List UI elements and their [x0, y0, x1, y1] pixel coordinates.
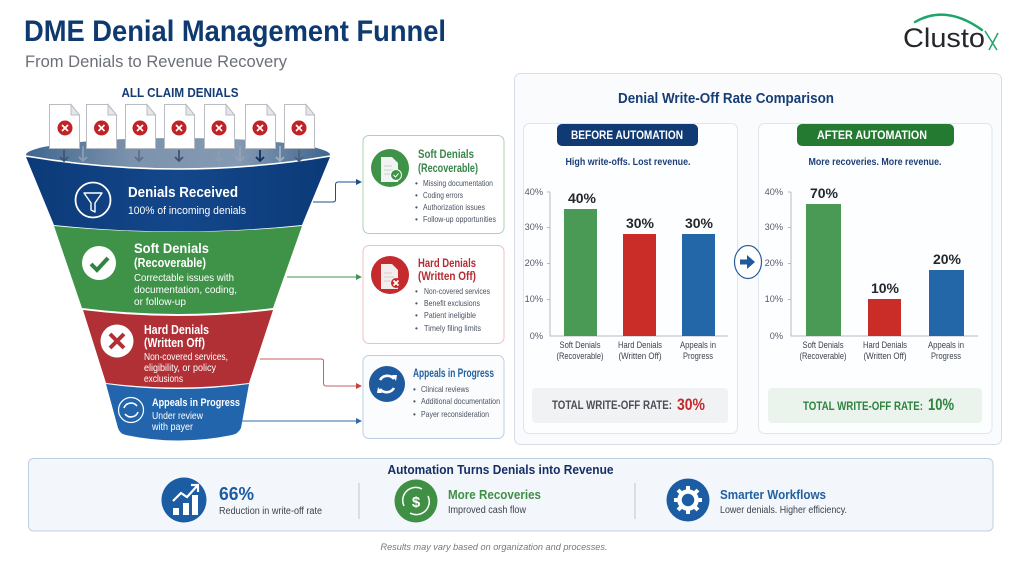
card: soft denials: Authorization issues — [423, 203, 485, 212]
bar chart: before — [525, 187, 728, 361]
funnel tier: hard denials — [83, 310, 273, 388]
card: hard denials: (Written Off) — [418, 271, 476, 283]
bar chart: after: (Recoverable) — [800, 351, 846, 361]
card: hard denials: • — [415, 287, 418, 296]
funnel tier: appeals: Appeals in Progress — [152, 397, 240, 409]
funnel tier: soft denials: Soft Denials — [134, 240, 209, 256]
connector arrow: soft to hard card — [287, 276, 361, 278]
before badge: BEFORE AUTOMATION — [571, 128, 683, 142]
card: soft denials: • — [415, 215, 418, 224]
summary heading: Automation Turns Denials into Revenue — [388, 462, 614, 477]
funnel tier: denials received: 100% of incoming denials — [128, 205, 246, 217]
bar chart: after — [765, 185, 978, 361]
card: appeals in progress: Additional documentation — [421, 397, 500, 406]
stat: 66% — [162, 478, 322, 522]
funnel tier: hard denials: exclusions — [144, 374, 183, 385]
card: appeals in progress: Payer reconsideration — [421, 410, 489, 419]
bar chart: before: 40% — [568, 190, 597, 206]
bar chart: after: (Written Off) — [864, 351, 906, 361]
bar chart: before: 0% — [530, 331, 543, 341]
divider — [358, 483, 360, 519]
connector arrow: appeals to card — [241, 420, 361, 422]
bar chart: before: 30% — [685, 215, 714, 231]
bar chart: after: 70% — [810, 185, 839, 201]
connector arrow: hard to appeals card — [260, 359, 361, 386]
funnel tier: soft denials: or follow-up — [134, 296, 186, 308]
bar chart: before: (Recoverable) — [556, 351, 604, 361]
icon: funnel — [76, 182, 110, 218]
bar chart: before: Progress — [683, 351, 713, 361]
card: soft denials: Soft Denials — [418, 149, 474, 161]
before total: 30% — [677, 395, 705, 414]
stat: 66%: Reduction in write-off rate — [219, 506, 322, 517]
card: hard denials: Timely filing limits — [424, 324, 481, 333]
document 4 — [164, 104, 194, 148]
comparison heading: Denial Write-Off Rate Comparison — [618, 91, 834, 107]
funnel tier: soft denials — [54, 226, 302, 314]
card: soft denials: Coding errors — [423, 191, 463, 200]
after tagline: More recoveries. More revenue. — [808, 157, 942, 168]
panel: write-off rate comparison — [514, 74, 1002, 444]
divider — [634, 483, 636, 519]
before total — [532, 388, 728, 423]
bar chart: before: 10% — [525, 294, 543, 304]
panel: automation summary — [28, 458, 993, 531]
bar chart: after: 20% — [765, 258, 783, 268]
funnel — [26, 138, 330, 440]
card: appeals in progress — [363, 356, 504, 438]
card: appeals in progress: Appeals in Progress — [413, 368, 494, 380]
card: soft denials: • — [415, 203, 418, 212]
card: soft denials: • — [415, 191, 418, 200]
panel: before automation — [524, 124, 738, 434]
footnote: Results may vary based on organization and processes. — [380, 542, 608, 553]
funnel tier: appeals — [106, 384, 249, 440]
card: hard denials: Hard Denials — [418, 258, 476, 270]
icon: dollar cycle — [394, 480, 438, 522]
card: hard denials — [363, 246, 504, 344]
panel: after automation — [758, 124, 992, 434]
before badge — [557, 124, 698, 146]
bar chart: after: Appeals in — [928, 340, 964, 350]
after badge: AFTER AUTOMATION — [817, 128, 927, 142]
logo: Clustox — [903, 15, 998, 53]
bar chart: before: Soft Denials — [560, 340, 601, 350]
card: appeals in progress: • — [413, 397, 416, 406]
card: hard denials: • — [415, 311, 418, 320]
card: hard denials: Non-covered services — [424, 287, 490, 296]
arrow: before to after — [734, 246, 762, 278]
icon: document check — [371, 149, 409, 187]
funnel tier: appeals: Under review — [152, 411, 204, 422]
card: hard denials: Patient ineligible — [424, 311, 476, 320]
after total — [768, 388, 982, 423]
stat: more recoveries: Improved cash flow — [448, 505, 527, 516]
drop arrows — [60, 146, 303, 161]
card: soft denials: Follow-up opportunities — [423, 215, 496, 224]
document 1 — [50, 104, 80, 148]
bar chart: after: 10% — [871, 280, 900, 296]
bar chart: after: 0% — [770, 331, 783, 341]
icon: document x — [371, 256, 409, 294]
funnel tier: hard denials: (Written Off) — [144, 336, 205, 350]
bar chart: after: 20% — [933, 251, 962, 267]
card: soft denials: • — [415, 179, 418, 188]
funnel tier: soft denials: Correctable issues with — [134, 272, 234, 284]
card: hard denials: • — [415, 324, 418, 333]
funnel tier: hard denials: Hard Denials — [144, 323, 209, 337]
funnel tier: soft denials: (Recoverable) — [134, 256, 206, 270]
bar chart: after: 10% — [765, 294, 783, 304]
bar chart: after: 30% — [765, 222, 783, 232]
logo: Clustox: Clusto — [903, 23, 985, 53]
card: appeals in progress: Clinical reviews — [421, 385, 469, 394]
card: soft denials — [363, 136, 504, 234]
icon: gear — [666, 478, 710, 522]
bar chart: after: Hard Denials — [863, 340, 907, 350]
bar chart: after: 40% — [765, 187, 783, 197]
funnel tier: denials received: Denials Received — [128, 185, 238, 201]
card: appeals in progress: • — [413, 410, 416, 419]
document 5 — [204, 104, 234, 148]
title: DME Denial Management Funnel — [24, 15, 446, 48]
icon: dollar cycle: $ — [412, 494, 421, 511]
bar chart: after: Soft Denials — [802, 340, 844, 350]
document 3 — [126, 104, 156, 148]
icon: growth chart — [162, 478, 206, 522]
bar chart: before: 40% — [525, 187, 543, 197]
funnel tier: soft denials: documentation, coding, — [134, 284, 237, 296]
document 7 — [284, 104, 314, 148]
funnel rim — [26, 138, 330, 172]
stat: 66%: 66% — [219, 484, 254, 504]
document 2 — [86, 104, 116, 148]
stat: smarter workflows — [666, 478, 847, 522]
funnel tier: hard denials: Non-covered services, — [144, 352, 228, 363]
funnel tier: appeals: with payer — [151, 422, 194, 433]
icon: check — [82, 246, 116, 280]
before total: TOTAL WRITE-OFF RATE: — [552, 400, 672, 412]
funnel label: ALL CLAIM DENIALS — [122, 86, 238, 100]
card: hard denials: Benefit exclusions — [424, 299, 480, 308]
icon: x — [100, 324, 134, 358]
before tagline: High write-offs. Lost revenue. — [566, 157, 691, 168]
card: soft denials: (Recoverable) — [418, 163, 478, 175]
card: hard denials: • — [415, 299, 418, 308]
icon: refresh — [369, 366, 405, 402]
after total: TOTAL WRITE-OFF RATE: — [803, 401, 923, 413]
bar chart: before: 30% — [525, 222, 543, 232]
card: appeals in progress: • — [413, 385, 416, 394]
funnel tier: hard denials: eligibility, or policy — [144, 363, 216, 374]
bar chart: before: Hard Denials — [618, 340, 662, 350]
stat: more recoveries: More Recoveries — [448, 487, 541, 502]
card: soft denials: Missing documentation — [423, 179, 493, 188]
bar chart: before: 30% — [626, 215, 655, 231]
after badge — [797, 124, 954, 146]
bar chart: before: 20% — [525, 258, 543, 268]
funnel tier: denials received — [26, 156, 330, 232]
bar chart: before: (Written Off) — [618, 351, 662, 361]
stat: smarter workflows: Lower denials. Higher efficiency. — [720, 505, 847, 516]
bar chart: after: Progress — [931, 351, 961, 361]
stat: smarter workflows: Smarter Workflows — [720, 487, 826, 502]
denied documents — [50, 104, 314, 148]
stat: more recoveries — [394, 480, 541, 522]
bar chart: before: Appeals in — [680, 340, 716, 350]
icon: cycle — [118, 398, 144, 422]
subtitle: From Denials to Revenue Recovery — [25, 52, 287, 71]
connector arrow: received to soft card — [313, 182, 361, 202]
document 6 — [246, 104, 276, 148]
after total: 10% — [928, 395, 954, 414]
